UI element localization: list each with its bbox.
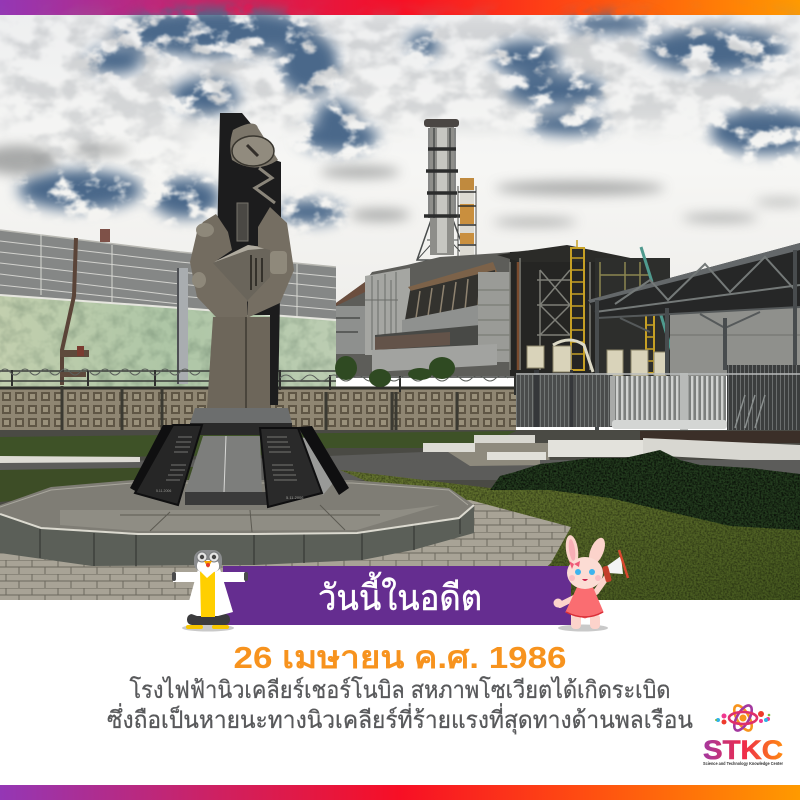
reactor sarcophagus building [336, 240, 690, 376]
top gradient bar [0, 0, 800, 15]
memorial monument [130, 113, 349, 507]
duct [179, 268, 188, 384]
stone forearm [207, 317, 270, 408]
yellow scaffolding [571, 240, 654, 373]
description text: ซึ่งถือเป็นหายนะทางนิวเคลียร์ที่ร้ายแรงที่สุดทางด้านพลเรือน [107, 703, 693, 735]
black slab [217, 113, 281, 405]
right canopy and back wall [588, 243, 800, 430]
outer right plaque [298, 426, 349, 495]
left hand [190, 214, 247, 317]
outer left plaque [130, 425, 173, 492]
security fences and gate [516, 365, 800, 431]
external ladder [62, 238, 76, 385]
concrete perimeter fence [0, 369, 516, 437]
white lower panel [0, 600, 800, 785]
description text: โรงไฟฟ้านิวเคลียร์เชอร์โนบิล สหภาพโซเวียตได้เกิดระเบิด [130, 676, 670, 704]
tower relief [237, 203, 248, 241]
mascot: penguin scientist [172, 550, 248, 632]
juniper bush [490, 450, 800, 530]
description text [107, 676, 693, 735]
bottom gradient bar [0, 785, 800, 800]
right inscription plaque: 5.11.2006 [286, 495, 304, 500]
right inscription plaque [260, 428, 322, 507]
left inscription plaque [135, 425, 202, 505]
left inscription plaque: 5.11.2006 [156, 489, 171, 493]
sky with clouds [0, 8, 800, 315]
white scaffold blocks [527, 346, 690, 376]
lightning bolt [255, 168, 275, 203]
atom emblem [715, 703, 770, 733]
trees [335, 356, 455, 387]
heading banner: วันนี้ในอดีต [318, 571, 482, 618]
STKC wordmark: STKC [703, 735, 783, 765]
circular stone platform [0, 480, 474, 566]
left turbine building [0, 229, 336, 390]
crane [641, 247, 652, 282]
reactor stacks [417, 119, 476, 260]
chimney pipe [100, 229, 110, 242]
date heading: 26 เมษายน ค.ศ. 1986 [234, 640, 566, 675]
tagline: Science and Technology Knowledge Center [703, 761, 783, 766]
photo: Chernobyl memorial and reactor [0, 8, 800, 600]
bell [230, 123, 278, 168]
paved ring around the platform [0, 500, 571, 600]
right hand [247, 207, 294, 318]
miniature plant building [212, 245, 270, 302]
heading banner [223, 566, 571, 625]
granite pedestal [190, 408, 292, 423]
ground: grass, road and kerbs [0, 430, 800, 600]
STKC logo [703, 703, 783, 766]
mascot: pink rabbit with megaphone [554, 534, 628, 632]
